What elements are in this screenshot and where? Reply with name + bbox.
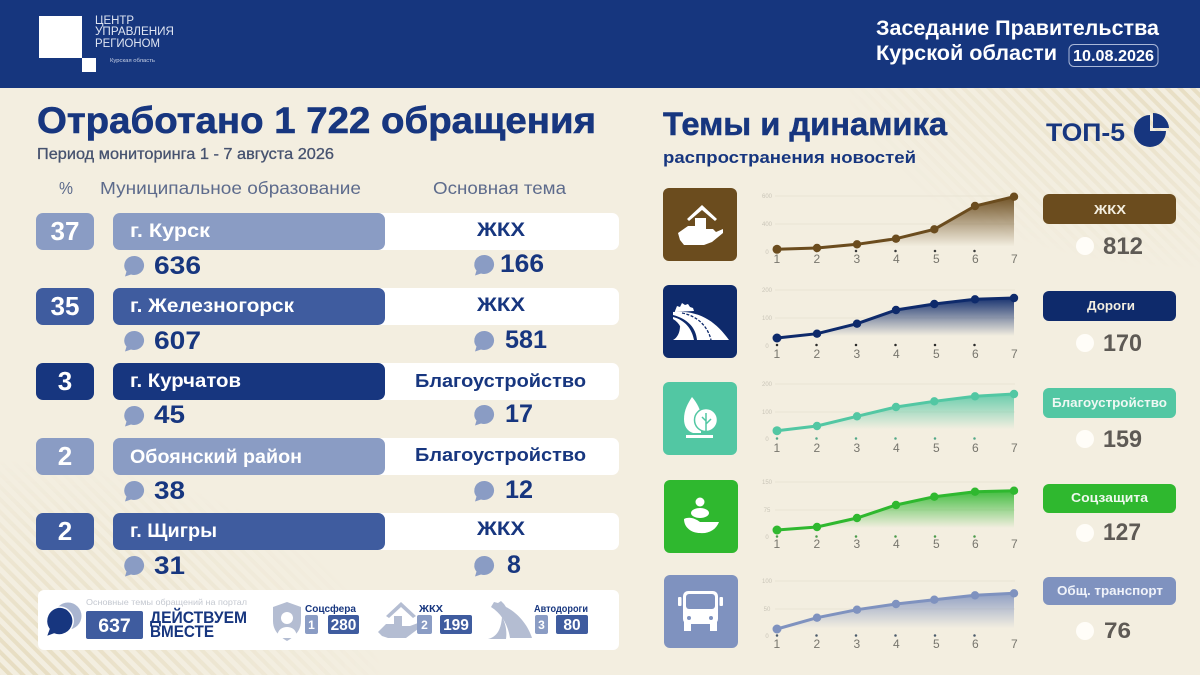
chart: roads: 0 — [765, 344, 769, 350]
row: Обоянский район: 2 — [58, 441, 72, 471]
top-5 label: ТОП-5 — [1046, 119, 1125, 147]
panel: portal topics: Соцсфера — [305, 603, 356, 615]
table headings: % — [59, 178, 73, 198]
category pill: landscaping — [1043, 388, 1176, 453]
category pill: public transport: Общ. транспорт — [1057, 583, 1163, 598]
row: Щигры: 31 — [154, 552, 185, 580]
header title: Курской области — [876, 42, 1057, 65]
category pill: landscaping: Благоустройство — [1052, 395, 1167, 410]
chart: landscaping: 0 — [765, 437, 769, 443]
logo: Курская область — [110, 58, 155, 64]
row: Курск: г. Курск — [130, 221, 211, 242]
icon: chat bubbles — [46, 602, 82, 637]
panel: portal topics — [38, 590, 619, 650]
row: Курчатов: г. Курчатов — [130, 371, 241, 392]
panel: portal topics: ЖКХ — [418, 603, 443, 615]
logo: РЕГИОНОМ — [95, 38, 160, 50]
chart: roads: 1234567 — [774, 347, 1018, 361]
row: Курск: ЖКХ — [476, 220, 525, 241]
panel: portal topics: 280 — [331, 617, 356, 634]
row: Обоянский район — [36, 438, 619, 505]
date badge: 10.08.2026 — [1073, 48, 1154, 65]
row: Щигры: г. Щигры — [130, 521, 217, 542]
icon: bus — [664, 575, 738, 648]
row: Курск: 37 — [51, 216, 79, 246]
row: Железногорск: г. Железногорск — [130, 296, 295, 317]
table headings: Муниципальное образование — [100, 178, 361, 198]
row: Курск: 636 — [154, 252, 201, 280]
icon: social protection — [664, 480, 738, 553]
category pill: roads: Дороги — [1087, 298, 1135, 313]
chart: public transport: 1234567 — [774, 637, 1018, 651]
monitoring period: Период мониторинга 1 - 7 августа 2026 — [37, 146, 334, 163]
table headings: Основная тема — [433, 178, 566, 198]
row: Щигры: 8 — [507, 551, 521, 579]
chart: landscaping — [762, 382, 1018, 455]
row: Курск: 166 — [500, 250, 544, 278]
chart: social protection: 0 — [765, 535, 769, 541]
panel: portal topics: ВМЕСТЕ — [150, 623, 214, 641]
chart: social protection: 150 — [762, 480, 773, 486]
category pill: housing — [1043, 194, 1176, 260]
chart: housing — [762, 192, 1018, 266]
panel: portal topics: Основные темы обращений на портал — [86, 597, 247, 607]
row: Обоянский район: 12 — [505, 476, 533, 504]
header title — [876, 17, 1159, 65]
logo: УПРАВЛЕНИЯ — [95, 26, 174, 38]
panel: portal topics: 3 — [538, 618, 545, 632]
row: Обоянский район: 38 — [154, 477, 185, 505]
icon: house in hand — [378, 602, 418, 638]
icon: landscaping — [663, 382, 737, 455]
row: Обоянский район: Обоянский район — [130, 447, 302, 468]
logo — [39, 15, 174, 72]
chart: public transport: 100 — [762, 579, 773, 585]
panel: portal topics: Автодороги — [534, 603, 588, 615]
chart: roads — [762, 288, 1018, 361]
category pill: public transport: 76 — [1104, 618, 1131, 643]
panel: portal topics: 637 — [98, 615, 131, 637]
chart: roads: 200 — [762, 288, 773, 294]
chart: housing: 1234567 — [774, 252, 1018, 266]
chart: public transport — [762, 579, 1018, 651]
chart: public transport: 50 — [764, 607, 771, 613]
row: Курчатов: 3 — [58, 366, 72, 396]
category pill: social protection: Соцзащита — [1071, 491, 1149, 505]
panel: portal topics: 2 — [421, 618, 428, 632]
row: Курчатов: Благоустройство — [415, 370, 586, 391]
row: Курчатов: 17 — [505, 400, 533, 428]
header title: Заседание Правительства — [876, 17, 1159, 40]
category pill: housing: 812 — [1103, 233, 1143, 260]
row: Курчатов: 45 — [154, 401, 185, 429]
chart: public transport: 0 — [765, 634, 769, 640]
panel: portal topics: 80 — [563, 617, 581, 634]
main title: Отработано 1 722 обращения — [37, 100, 596, 141]
header band — [0, 0, 1200, 88]
chart: housing: 0 — [765, 250, 769, 256]
row: Железногорск: 607 — [154, 327, 201, 355]
row: Обоянский район: Благоустройство — [415, 444, 586, 465]
date badge — [1069, 44, 1158, 66]
logo: ЦЕНТР — [95, 15, 134, 27]
row: Курчатов — [36, 363, 619, 429]
row: Щигры — [36, 513, 619, 580]
row: Железногорск: 35 — [51, 291, 79, 321]
icon: pie chart — [1134, 113, 1169, 147]
category pill: roads: 170 — [1103, 330, 1142, 357]
chart: social protection — [762, 480, 1018, 551]
chart: housing: 600 — [762, 194, 773, 200]
chart: housing: 400 — [762, 222, 773, 228]
panel: portal topics: 199 — [443, 617, 469, 634]
chart: landscaping: 1234567 — [774, 441, 1018, 455]
chart: landscaping: 200 — [762, 382, 773, 388]
right subheading: распространения новостей — [663, 149, 916, 167]
category pill: public transport — [1043, 577, 1176, 643]
table headings — [59, 178, 566, 198]
row: Железногорск: ЖКХ — [476, 295, 525, 316]
row: Курск — [36, 213, 619, 280]
icon: road — [488, 601, 532, 639]
row: Железногорск: 581 — [505, 326, 547, 354]
category pill: roads — [1043, 291, 1176, 357]
icon: shield person — [273, 602, 301, 641]
chart: roads: 100 — [762, 316, 773, 322]
right heading: Темы и динамика — [663, 106, 947, 142]
category pill: housing: ЖКХ — [1093, 202, 1126, 217]
category pill: social protection — [1043, 484, 1176, 546]
icon: roads — [663, 285, 737, 358]
panel: portal topics: 1 — [308, 618, 315, 632]
row: Щигры: 2 — [58, 516, 72, 546]
category pill: landscaping: 159 — [1103, 426, 1142, 453]
icon: housing — [663, 188, 737, 261]
chart: social protection: 75 — [764, 508, 771, 514]
row: Щигры: ЖКХ — [476, 519, 525, 540]
chart: social protection: 1234567 — [774, 537, 1018, 551]
category pill: social protection: 127 — [1103, 519, 1141, 546]
row: Железногорск — [36, 288, 619, 355]
chart: landscaping: 100 — [762, 410, 773, 416]
panel: portal topics: ДЕЙСТВУЕМ — [150, 608, 247, 627]
